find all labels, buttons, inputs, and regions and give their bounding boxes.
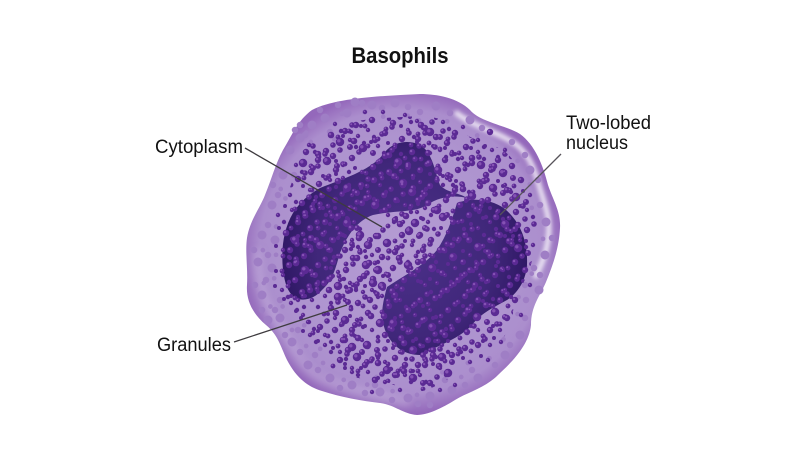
leader line: nucleus	[500, 154, 561, 215]
label: Cytoplasm	[155, 137, 382, 227]
cell membrane and cytoplasm body	[246, 94, 560, 415]
label: Two-lobed nucleus: Two-lobed	[566, 113, 651, 134]
title: Basophils	[352, 43, 448, 68]
label: Granules: Granules	[157, 335, 231, 356]
faded outer granules	[254, 102, 552, 405]
membrane highlight	[258, 112, 549, 403]
granules	[271, 108, 539, 399]
granule bodies	[271, 108, 539, 399]
nucleus lobe: upper left	[282, 142, 467, 300]
cell: basophil	[246, 94, 560, 415]
granule highlights	[277, 111, 533, 391]
leader line: Granules	[234, 305, 347, 342]
label: Granules	[157, 305, 347, 356]
infographic: basophil diagram	[156, 47, 650, 415]
leader line: Cytoplasm	[245, 148, 382, 227]
two-lobed nucleus	[282, 142, 527, 355]
label: Two-lobed nucleus	[500, 113, 651, 215]
label: Cytoplasm: Cytoplasm	[155, 137, 243, 158]
label: Two-lobed nucleus: nucleus	[566, 133, 628, 154]
nucleus lobe: lower right	[382, 200, 527, 355]
